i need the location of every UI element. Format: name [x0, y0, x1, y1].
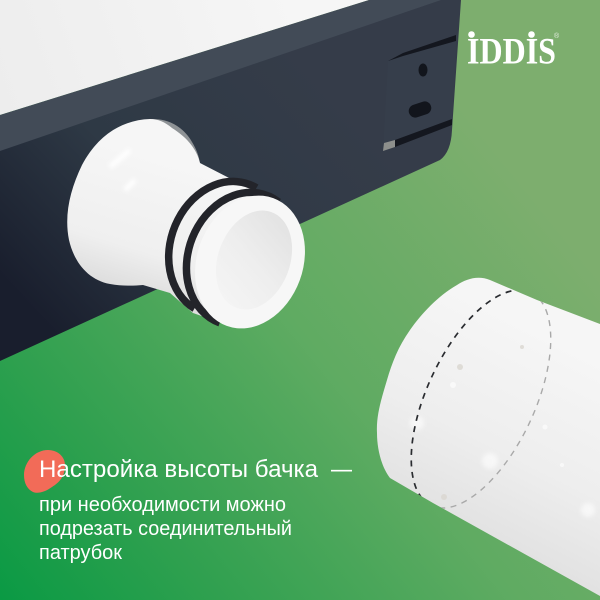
foam speckles — [410, 382, 595, 517]
front O-ring — [168, 176, 279, 328]
heading: Настройка высоты бачка — [39, 456, 319, 483]
bore opening — [203, 200, 305, 320]
flange and tube body — [67, 119, 303, 328]
body text: при необходимости можно — [39, 494, 286, 516]
white foam pipe — [377, 270, 600, 596]
chamfer band — [0, 0, 441, 151]
IDDIS logo: ® — [554, 32, 560, 40]
white connection fitting — [67, 119, 323, 344]
mounting hole — [418, 64, 428, 76]
cistern box — [0, 0, 461, 361]
dashed cut line — [410, 290, 552, 509]
dark side face — [0, 0, 461, 361]
metal shadow behind flange — [146, 119, 200, 170]
highlights — [110, 150, 135, 190]
mounting slot — [407, 100, 433, 119]
body text — [39, 494, 292, 564]
IDDIS logo: IDDIS — [467, 32, 556, 72]
end collar — [177, 180, 323, 344]
coral accent blob — [24, 450, 65, 493]
rear O-ring — [151, 165, 257, 314]
white top surface — [0, 0, 369, 115]
body text: подрезать соединительный — [39, 518, 292, 540]
heading: — — [331, 456, 352, 483]
mounting bracket — [383, 35, 457, 151]
body text: патрубок — [39, 542, 122, 564]
